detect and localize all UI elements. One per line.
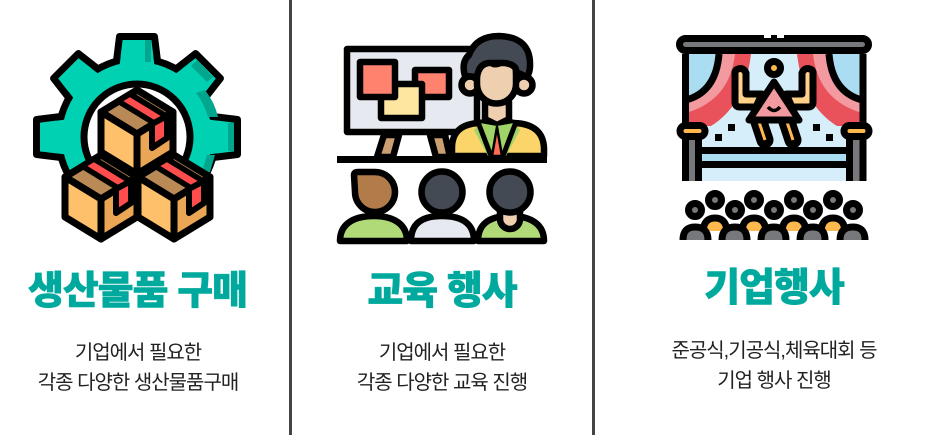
post cap left	[680, 126, 705, 136]
easel legs	[377, 135, 399, 157]
heading: 기업행사: 기업행사	[704, 267, 844, 310]
floor line	[337, 156, 547, 163]
window corners	[686, 54, 719, 100]
heading: 생산물품 구매: 생산물품 구매	[28, 270, 247, 313]
text block: column 1: 기업에서 필요한	[75, 342, 201, 364]
text block: column 1	[38, 342, 238, 394]
audience person 3	[478, 172, 544, 241]
top bar gap	[764, 33, 784, 38]
icon: theatre stage	[680, 33, 869, 240]
post cap right	[844, 126, 869, 136]
audience person 2	[411, 172, 474, 241]
note yellow	[381, 84, 422, 118]
post left	[686, 135, 698, 181]
text block: column 3: 기업 행사 진행	[717, 370, 831, 392]
icon: gear with boxes	[36, 36, 238, 239]
gear	[33, 33, 241, 174]
post right	[850, 135, 863, 181]
divider right	[592, 0, 595, 435]
presentation board	[347, 49, 477, 132]
puppet	[735, 62, 813, 140]
text block: column 2	[357, 342, 527, 394]
curtain left	[686, 54, 751, 126]
box left	[65, 155, 137, 239]
text block: column 3: 준공식,기공식,체육대회 등	[671, 340, 877, 362]
box right	[138, 155, 210, 239]
crowd	[683, 194, 865, 240]
text block: column 2: 기업에서 필요한	[379, 342, 505, 364]
stage backdrop	[685, 52, 863, 181]
confetti	[715, 124, 833, 141]
presenter	[452, 36, 544, 156]
heading: 교육 행사: 교육 행사	[367, 270, 517, 313]
side walls	[686, 54, 863, 130]
icon: presenter and audience	[337, 36, 547, 241]
top bar	[680, 38, 868, 50]
text block: column 3	[671, 340, 877, 392]
text block: column 1: 각종 다양한 생산물품구매	[38, 372, 238, 394]
note red 1	[360, 62, 395, 97]
text block: column 2: 각종 다양한 교육 진행	[357, 372, 527, 394]
box top	[101, 90, 173, 174]
rail bars	[700, 147, 850, 154]
note red 2	[415, 70, 449, 97]
divider left	[289, 0, 292, 435]
curtain right	[797, 54, 862, 126]
audience person 1	[340, 172, 407, 241]
